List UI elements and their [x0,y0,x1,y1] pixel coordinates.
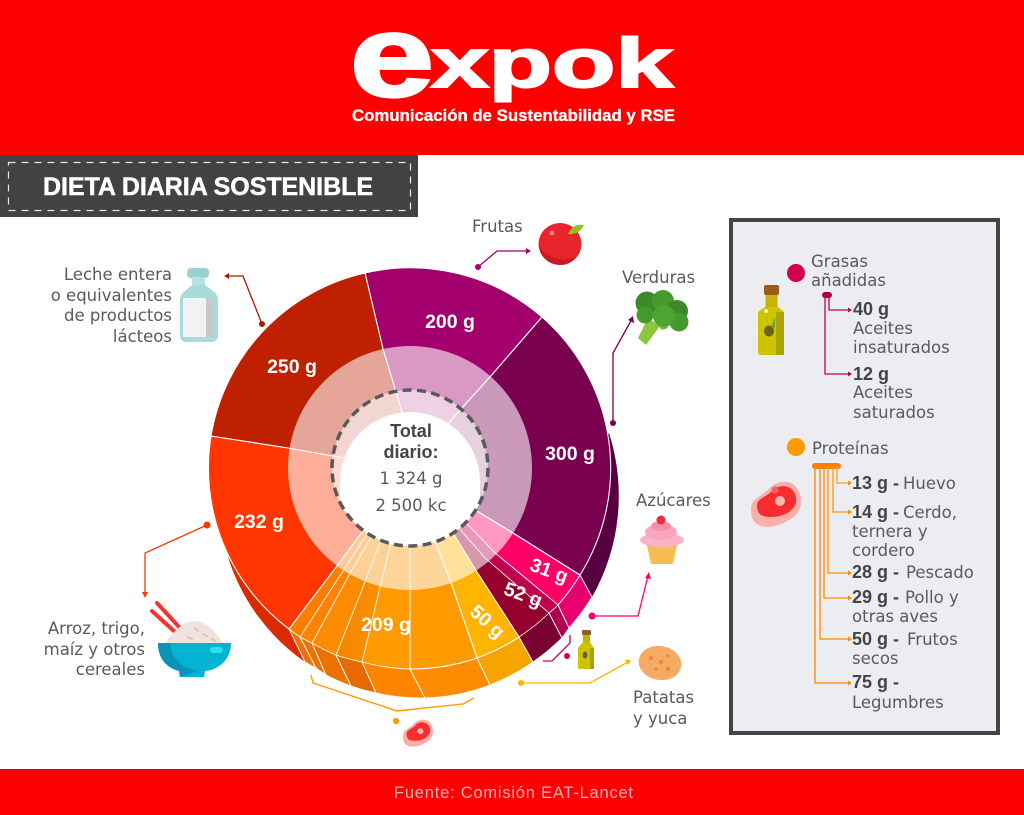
section: proteins: 13 g - [852,473,899,493]
segment values: 52 g [501,578,545,612]
section: proteins: otras aves [852,607,938,626]
label: potatoes [518,660,694,728]
label: vegetables: Verduras [622,268,695,287]
label: cereals: Arroz, trigo, [48,619,145,638]
section: added fats: Aceites [853,383,913,402]
panel: fats and proteins [731,220,998,733]
segment values: 200 g [425,311,475,333]
center total: 2 500 kc [375,496,447,515]
donut chart: daily diet [208,268,619,698]
section: added fats: 12 g [853,364,889,384]
label: sugars: Azúcares [636,491,711,510]
segment values: 300 g [545,443,595,465]
label: dairy: Leche entera [64,265,172,284]
segment values: 232 g [234,511,284,533]
leader: added fats [543,635,570,661]
section: proteins: Cerdo, [903,503,957,522]
section: proteins: Pollo y [905,588,959,607]
label: potatoes: y yuca [633,709,687,728]
icon: small oil bottle [578,630,594,669]
section: proteins: Legumbres [852,693,944,712]
icon: small meat [403,720,433,747]
center total: 1 324 g [380,469,442,488]
label: cereals: cereales [76,660,145,679]
title box: DIETA DIARIA SOSTENIBLE [43,173,373,201]
label: vegetables [610,268,695,426]
icon: rice bowl [152,603,231,677]
section: proteins: Frutos [907,630,958,649]
leader: proteins bracket [311,675,474,724]
segment values: 50 g [465,601,509,643]
icon: broccoli [636,290,688,345]
section: proteins: Pescado [906,563,974,582]
label: dairy: o equivalentes [51,286,172,305]
center total [375,421,447,515]
footer: Fuente: Comisión EAT-Lancet [394,784,633,802]
segment values: 250 g [267,356,317,378]
logo [350,0,675,125]
section: added fats: Aceites [853,319,913,338]
segment values: 31 g [527,554,571,588]
section: proteins: ternera y [852,522,928,541]
section: added fats [787,252,950,422]
section: proteins: secos [852,649,899,668]
section: proteins: cordero [852,541,915,560]
label: dairy [51,265,265,346]
icon: milk bottle [180,268,218,342]
segment values [234,311,595,643]
icon: oil bottle [758,285,784,355]
section: added fats: insaturados [853,338,950,357]
section: proteins: 29 g - [852,587,899,607]
icon: apple [538,223,584,265]
section: added fats: saturados [853,403,935,422]
footer [0,769,1024,815]
label: cereals [44,522,210,679]
section: added fats: 40 g [853,299,889,319]
logo: xpok [431,24,673,102]
section: proteins [787,438,974,712]
section: proteins: 50 g - [852,629,899,649]
section: proteins: 28 g - [852,562,899,582]
label: dairy: lácteos [113,327,172,346]
3D lower layer [228,433,619,698]
section: added fats: añadidas [811,271,886,290]
label: fruit: Frutas [472,217,523,236]
segments [208,268,611,669]
label: fruit [472,217,531,270]
title box [0,155,418,217]
center total: diario: [383,442,439,462]
label: sugars [588,491,711,620]
label: potatoes: Patatas [633,688,694,707]
section: proteins: 14 g - [852,502,899,522]
logo: Comunicación de Sustentabilidad y RSE [352,106,675,125]
section: proteins: 75 g - [852,672,899,692]
icon: cupcake [640,516,684,564]
label: cereals: maíz y otros [44,640,145,659]
section: proteins: Huevo [903,474,956,493]
icon: potato [636,643,684,683]
segment values: 209 g [361,614,411,636]
header banner [0,0,1024,155]
section: added fats: Grasas [811,252,868,271]
icon: meat [751,482,801,527]
section: proteins: Proteínas [812,439,889,458]
center total: Total [390,421,432,441]
label: dairy: de productos [64,306,172,325]
